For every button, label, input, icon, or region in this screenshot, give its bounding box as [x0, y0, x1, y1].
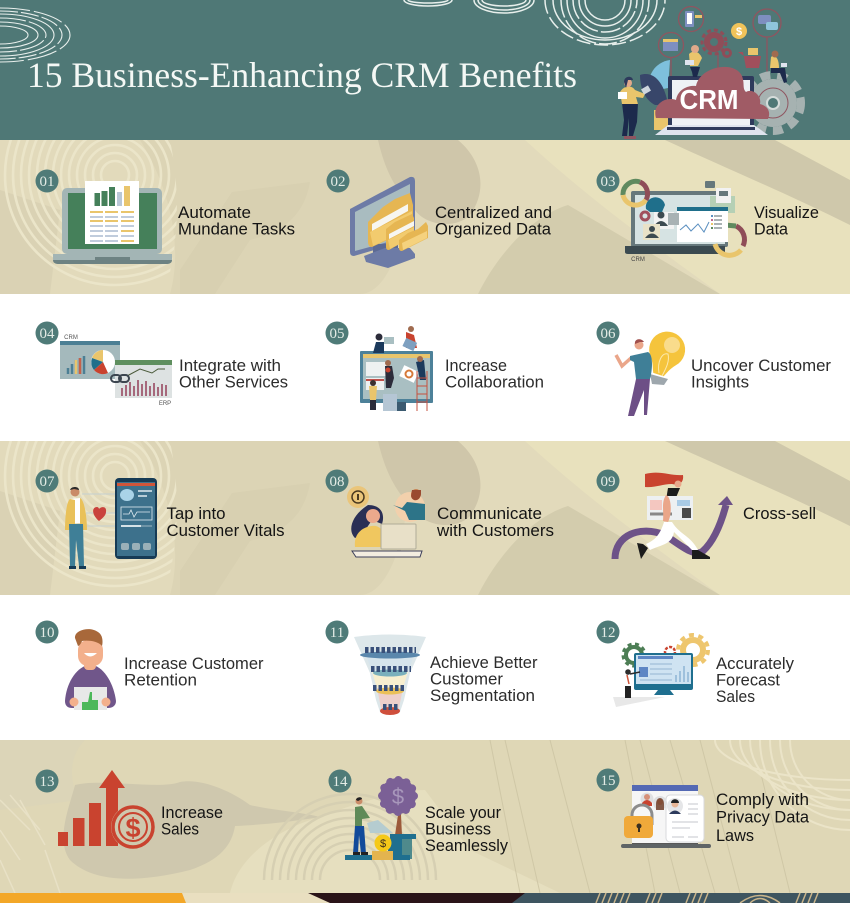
number badge 03: 03: [600, 174, 616, 190]
text: Tap into Customer Vitals: Tap into: [166, 505, 226, 523]
icon: monitor with folders: [350, 177, 428, 268]
benefit 01: [36, 170, 295, 264]
icon: CRM cloud illustration: [618, 6, 801, 139]
text: Increase Sales: Sales: [161, 820, 199, 838]
panel: header: [0, 0, 850, 140]
text: Increase Sales: Increase: [161, 804, 223, 822]
icon: man holding light bulb: [616, 327, 690, 416]
text: Uncover Customer Insights: Insights: [691, 374, 749, 392]
text: Increase Collaboration: Increase: [445, 357, 507, 375]
number badge 14: 14: [332, 774, 348, 790]
benefit 15: [596, 768, 810, 848]
icon: person with phone vitals: [65, 478, 157, 569]
number badge 05: 05: [330, 326, 344, 342]
number badge 02: 02: [330, 174, 346, 190]
icon: woman running on rising arrow: [615, 473, 733, 559]
icon: team around a board: [360, 326, 433, 411]
text: Achieve Better Customer Segmentation: Customer: [430, 670, 504, 688]
icon: forecast monitor with gears: [613, 635, 708, 707]
text: Tap into Customer Vitals: [166, 505, 284, 540]
benefit 14: [328, 770, 509, 860]
benefit 06: [596, 322, 832, 416]
icon: rising sales bars and dollar: $: [125, 813, 141, 843]
number badge 10: [36, 620, 58, 644]
number badge 04: [36, 322, 58, 344]
text: Accurately Forecast Sales: [716, 655, 795, 706]
text: Scale your Business Seamlessly: Seamlessly: [425, 837, 509, 855]
benefit 02: [326, 170, 552, 268]
number badge 12: 12: [600, 625, 616, 641]
icon: data visualization laptop: [623, 181, 744, 263]
band background texture: [0, 140, 850, 294]
text: Increase Customer Retention: Retention: [124, 672, 197, 690]
text: Achieve Better Customer Segmentation: Achieve Better: [430, 654, 538, 672]
text: Achieve Better Customer Segmentation: [430, 654, 538, 705]
number badge 11: [326, 620, 348, 644]
icon: person watering money tree: [345, 778, 416, 860]
text: Automate Mundane Tasks: Automate: [178, 204, 251, 222]
number badge 04: 04: [40, 326, 55, 342]
benefit 03: [596, 170, 819, 263]
band background texture: [0, 740, 850, 893]
text: Visualize Data: Data: [754, 220, 789, 238]
number badge 08: 08: [330, 474, 344, 490]
number badge 14: [328, 770, 352, 792]
benefit 12: [596, 620, 795, 707]
text: Achieve Better Customer Segmentation: Segmentation: [430, 687, 535, 705]
text: Comply with Privacy Data Laws: Comply with: [716, 791, 809, 809]
number badge 13: 13: [40, 774, 54, 790]
number badge 15: [596, 768, 620, 792]
text: Accurately Forecast Sales: Forecast: [716, 672, 780, 690]
text: Comply with Privacy Data Laws: Laws: [716, 827, 754, 845]
text: Communicate with Customers: Communicate: [437, 505, 542, 523]
text: Centralized and Organized Data: Organized Data: [435, 220, 552, 238]
icon: CRM cloud illustration: $: [736, 26, 742, 38]
text: Comply with Privacy Data Laws: [716, 791, 810, 845]
text: Integrate with Other Services: Integrate with: [179, 357, 281, 375]
number badge 07: [36, 470, 58, 492]
text: Comply with Privacy Data Laws: Privacy Data: [716, 808, 810, 826]
number badge 03: [596, 170, 620, 192]
panel: row 2: [36, 322, 832, 416]
benefit 09: [596, 470, 816, 559]
panel: row 3 band: [0, 441, 850, 595]
benefit 05: [326, 322, 544, 411]
text: Scale your Business Seamlessly: Business: [425, 820, 491, 838]
number badge 06: 06: [600, 326, 616, 342]
icon: rising sales bars and dollar: [58, 770, 155, 849]
number badge 09: 09: [600, 474, 616, 490]
text: Integrate with Other Services: [179, 357, 288, 392]
number badge 01: 01: [40, 174, 54, 190]
number badge 10: 10: [40, 625, 54, 641]
text: Centralized and Organized Data: [435, 204, 552, 238]
text: Scale your Business Seamlessly: Scale your: [425, 804, 501, 822]
text: Centralized and Organized Data: Centralized and: [435, 204, 552, 222]
text: Increase Collaboration: Collaboration: [445, 374, 544, 392]
icon: data visualization laptop: CRM: [631, 257, 645, 263]
footer strip: [0, 893, 850, 903]
icon text: CRM: CRM: [680, 84, 738, 115]
number badge 05: [326, 322, 348, 344]
number badge 09: [596, 470, 620, 492]
text: Increase Customer Retention: [124, 655, 264, 690]
icon: happy customer with thumbs up: [65, 629, 116, 710]
text: Uncover Customer Insights: Uncover Customer: [691, 357, 832, 375]
text: Automate Mundane Tasks: Mundane Tasks: [178, 220, 295, 238]
icon: person watering money tree: $: [380, 838, 386, 850]
fingerprint pattern top: [404, 0, 665, 45]
icon: segmentation funnel: [354, 634, 426, 715]
number badge 07: 07: [40, 474, 55, 490]
number badge 08: [326, 470, 348, 492]
number badge 02: [326, 170, 350, 192]
text: Visualize Data: Visualize: [754, 204, 819, 222]
text: Uncover Customer Insights: [691, 357, 832, 392]
icon: integrated CRM and ERP windows: ERP: [159, 401, 171, 407]
panel: row 5 band: [0, 740, 850, 893]
icon: person watering money tree: $: [392, 784, 404, 809]
icon: integrated CRM and ERP windows: [60, 335, 172, 407]
number badge 12: [596, 620, 620, 644]
text: Scale your Business Seamlessly: [425, 804, 509, 855]
divider band white row 2: [0, 294, 850, 441]
band background texture: [0, 441, 850, 595]
text: Integrate with Other Services: Other Services: [179, 374, 288, 392]
icon: support agent at computer: [347, 486, 425, 557]
number badge 13: [36, 770, 58, 792]
title: 15 Business-Enhancing CRM Benefits: [27, 55, 577, 95]
icon: laptop with report: [53, 181, 172, 264]
text: Communicate with Customers: with Customers: [436, 522, 554, 540]
text: Visualize Data: [754, 204, 819, 238]
text: Increase Sales: [161, 804, 223, 838]
text: Increase Customer Retention: Increase Customer: [124, 655, 264, 673]
benefit 04: [36, 322, 288, 407]
number badge 15: 15: [600, 773, 616, 789]
text: Automate Mundane Tasks: [178, 204, 295, 238]
text: Communicate with Customers: [436, 505, 554, 540]
fingerprint pattern left: [0, 8, 70, 62]
benefit 07: [36, 470, 284, 569]
benefit 10: [36, 620, 264, 710]
text: Cross-sell: Cross-sell: [743, 505, 816, 523]
text: Accurately Forecast Sales: Sales: [716, 688, 755, 706]
number badge 06: [596, 322, 620, 344]
panel: row 4: [0, 595, 850, 740]
benefit 11: [326, 620, 538, 715]
number badge 11: 11: [330, 625, 344, 641]
panel: row 1 band: [0, 140, 850, 294]
benefit 08: [326, 470, 554, 557]
benefit 13: [36, 770, 223, 849]
text: Increase Collaboration: [445, 357, 544, 392]
number badge 01: [36, 170, 58, 192]
icon: privacy lock with profiles: [621, 785, 711, 848]
text: Accurately Forecast Sales: Accurately: [716, 655, 795, 673]
text: Tap into Customer Vitals: Customer Vitals: [166, 522, 284, 540]
icon: integrated CRM and ERP windows: CRM: [64, 335, 78, 341]
